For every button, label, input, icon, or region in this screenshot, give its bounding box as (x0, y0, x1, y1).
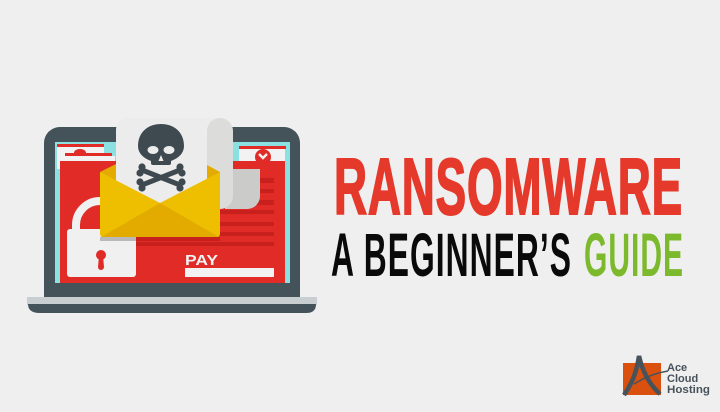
logo text: Cloud (667, 373, 698, 385)
logo text (667, 362, 710, 396)
logo text: Ace (667, 362, 687, 374)
logo mark (623, 356, 668, 395)
laptop lid (44, 127, 300, 297)
illustration: laptop with ransomware email (27, 118, 317, 313)
padlock icon (67, 201, 136, 277)
letter paper (116, 118, 220, 212)
scroll back curl (225, 169, 260, 209)
laptop base (27, 297, 317, 313)
laptop screen (55, 142, 290, 283)
logo: Ace Cloud Hosting (623, 356, 710, 396)
pay input bar (185, 268, 274, 277)
envelope back flaps (100, 164, 220, 184)
background window right (239, 146, 286, 173)
logo text: Hosting (667, 384, 710, 396)
scroll roll (207, 118, 233, 212)
skull and crossbones icon (136, 124, 186, 192)
text stripes (136, 178, 274, 246)
close button icon (255, 149, 271, 165)
pay label: PAY (185, 252, 218, 269)
envelope front (100, 172, 220, 237)
envelope shadow (100, 237, 220, 241)
main red ransom window (60, 161, 285, 283)
background window left (57, 144, 115, 169)
